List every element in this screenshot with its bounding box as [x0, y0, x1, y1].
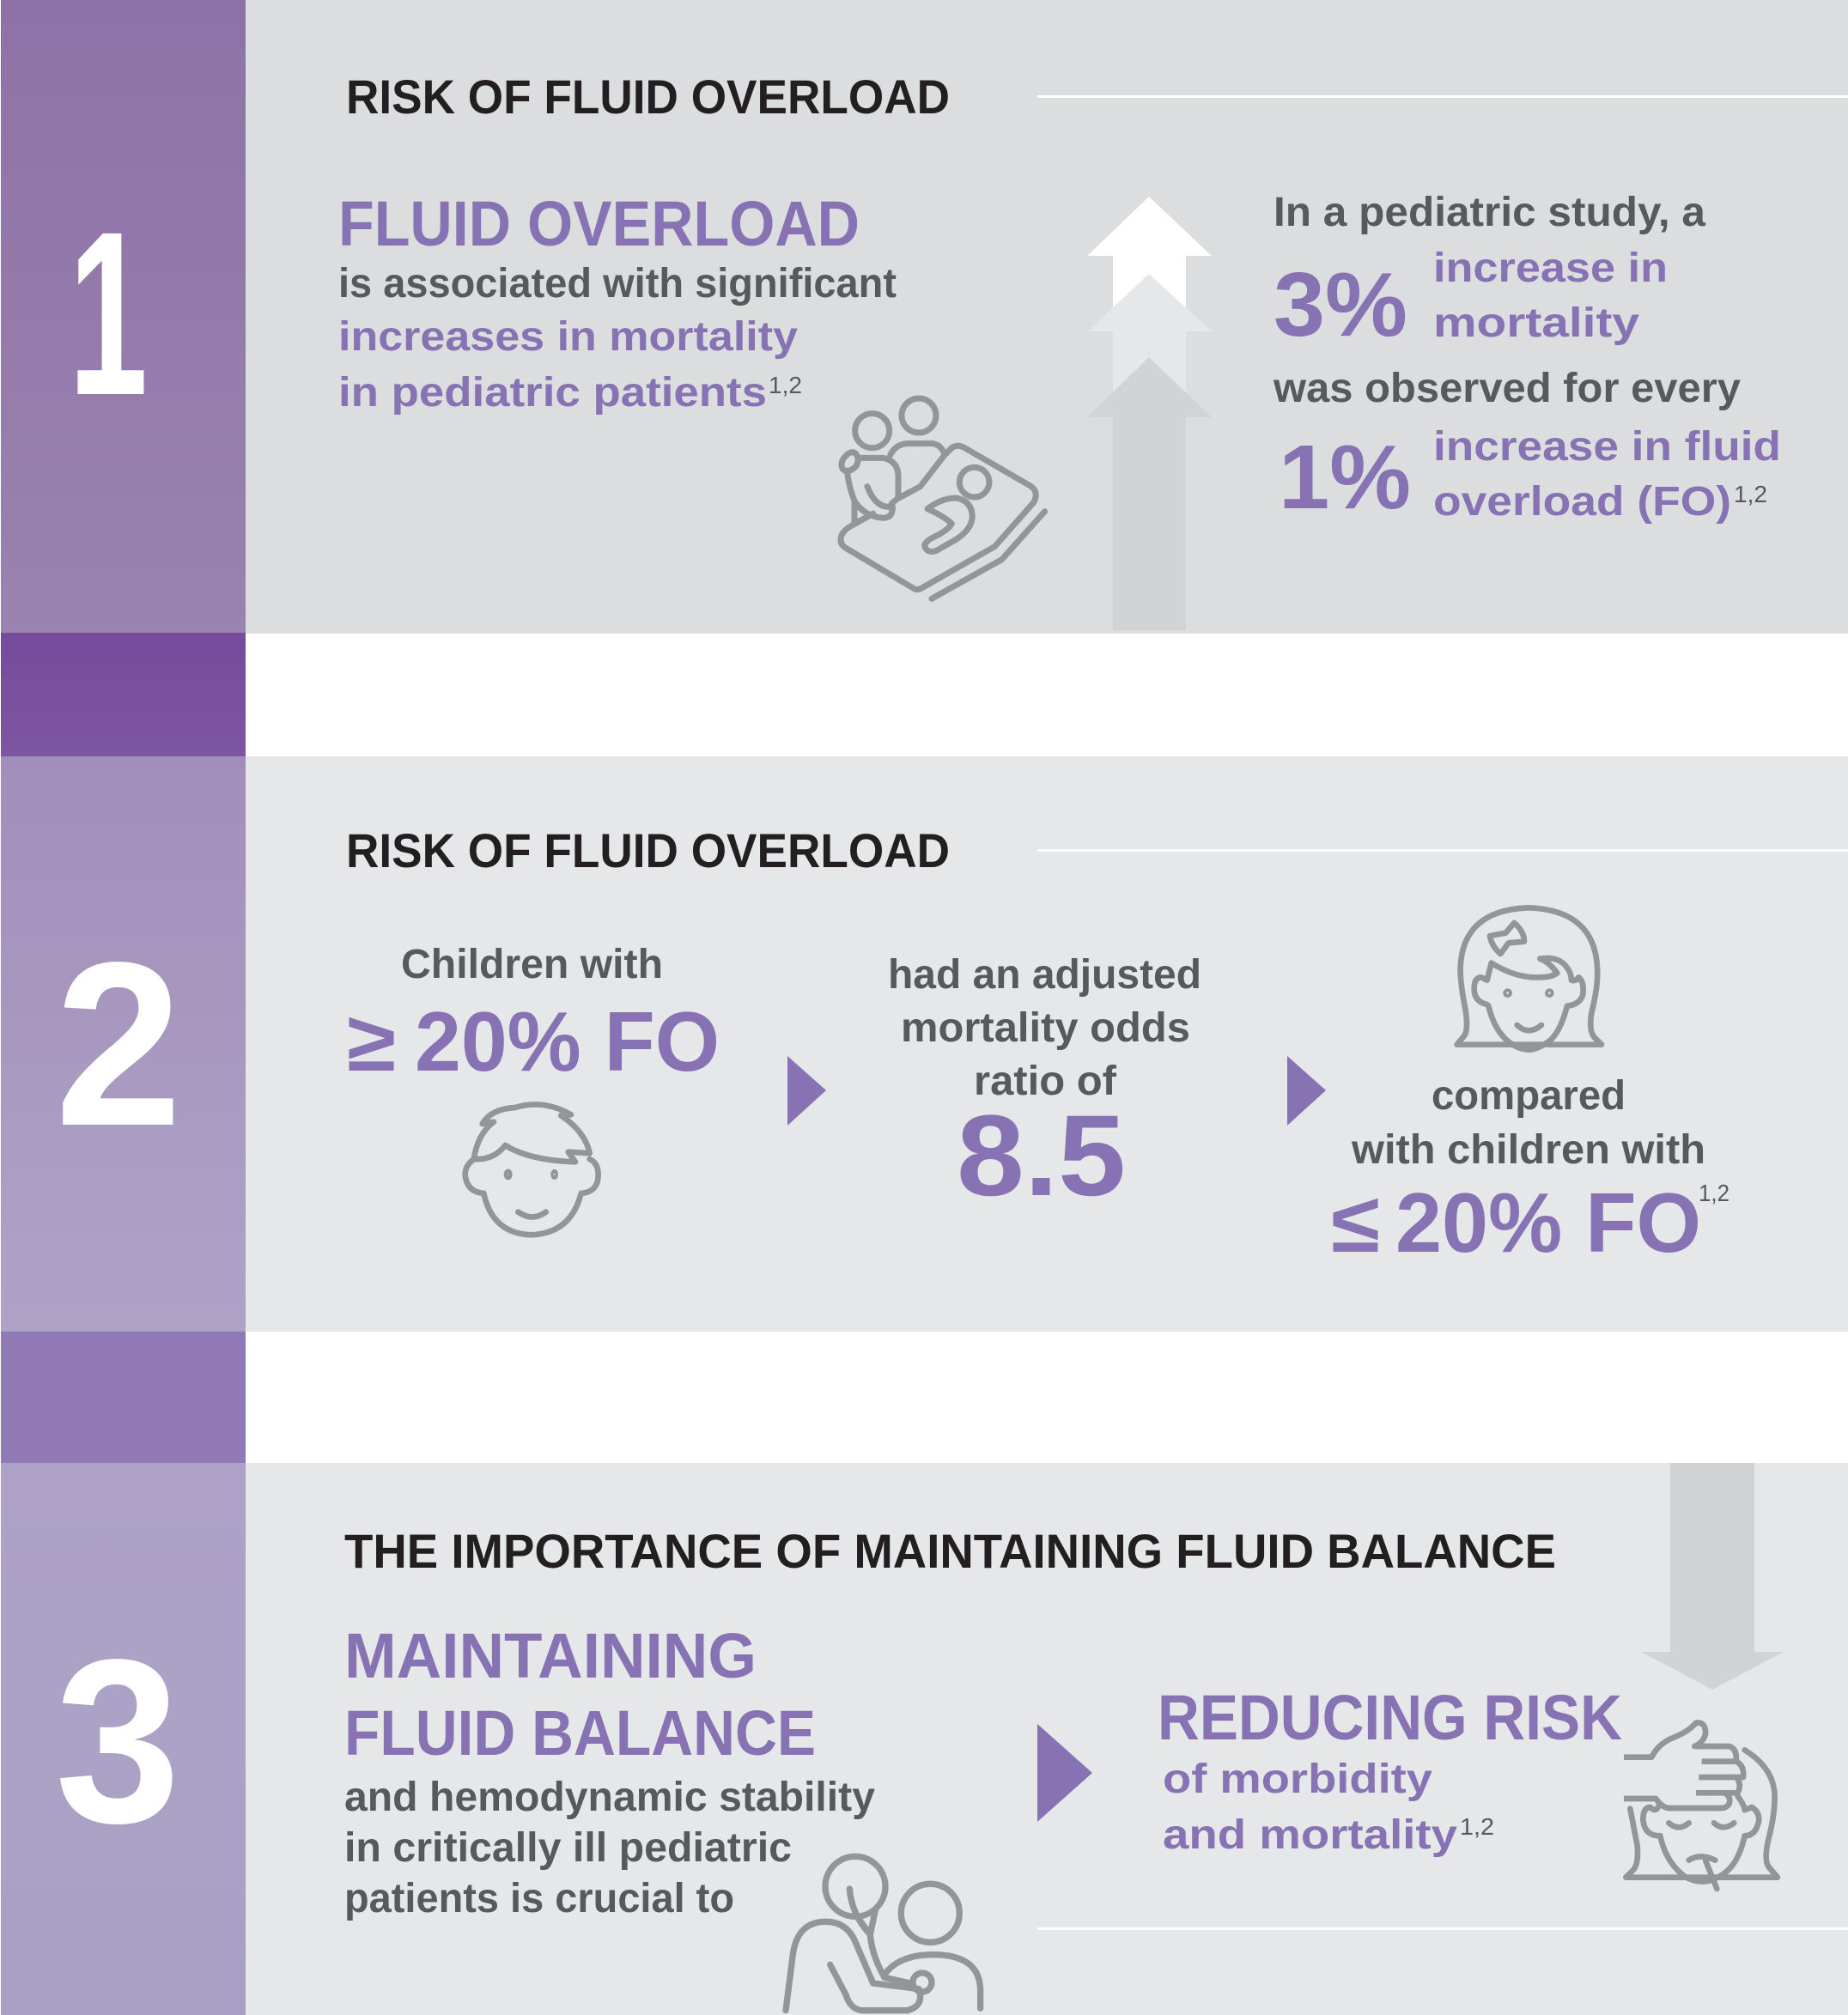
section 3 number block [1, 1463, 246, 2015]
text block: children with at least 20% FO: Children with [401, 942, 663, 987]
panel: section 3 [1, 1463, 1848, 2015]
heading: risk of fluid overload: RISK OF FLUID OVERLOAD [346, 823, 950, 877]
arrow: chevron 3 [1037, 1724, 1092, 1822]
text block: pediatric study statistics [1273, 190, 1781, 528]
text block: children with at least 20% FO [347, 942, 720, 1089]
icon: doctor with stethoscope [786, 1856, 981, 2011]
icon: hand on sick child's forehead [1624, 1722, 1778, 1889]
text block: pediatric study statistics: 3% [1274, 254, 1407, 355]
text block: adjusted mortality odds ratio: mortality odds [901, 1005, 1190, 1051]
text block: pediatric study statistics: 1,2 [1734, 481, 1767, 507]
sidebar connector 2 [1, 1332, 246, 1463]
text block: compared with children: ≤ [1331, 1175, 1380, 1270]
text block: compared with children [1331, 1073, 1729, 1270]
text block: reducing risk: 1,2 [1460, 1813, 1494, 1840]
text block: compared with children: 20% FO [1395, 1175, 1701, 1270]
text block: pediatric study statistics: In a pediatric study, a [1274, 190, 1705, 235]
text block: fluid overload statement: FLUID OVERLOAD [338, 188, 860, 259]
text block: fluid overload statement: increases in mortality [338, 314, 798, 360]
icon: caregiver and child in bed [841, 398, 1045, 598]
text block: maintaining fluid balance: and hemodynamic stability [344, 1775, 875, 1820]
text block: pediatric study statistics: mortality [1433, 300, 1639, 346]
panel: section 2 [1, 756, 1848, 1332]
text block: reducing risk: of morbidity [1163, 1757, 1432, 1802]
icon: girl face [1457, 907, 1602, 1050]
arrows: rising risk [1087, 197, 1212, 630]
arrow: downward risk [1641, 1463, 1784, 1690]
text block: pediatric study statistics: increase in fluid [1433, 424, 1781, 470]
sidebar connector 1 [1, 633, 246, 756]
text block: children with at least 20% FO: 20% FO [415, 994, 720, 1089]
text block: fluid overload statement: in pediatric patients [338, 370, 767, 416]
text block: reducing risk: REDUCING RISK [1158, 1682, 1622, 1753]
text block: pediatric study statistics: 1% [1279, 427, 1411, 528]
text block: reducing risk: and mortality [1163, 1812, 1457, 1858]
text block: adjusted mortality odds ratio: had an adjusted [888, 952, 1201, 998]
text block: maintaining fluid balance: in critically ill pediatric [344, 1825, 792, 1871]
text block: reducing risk [1158, 1682, 1622, 1858]
text block: adjusted mortality odds ratio: 8.5 [957, 1092, 1126, 1220]
arrow: chevron 2 [1287, 1056, 1326, 1126]
arrow: chevron 1 [787, 1056, 826, 1126]
panel: section 1 [1, 0, 1848, 634]
text block: pediatric study statistics: overload (FO) [1433, 479, 1731, 525]
icon: boy face [465, 1104, 599, 1235]
section 1 number block [1, 0, 246, 633]
text block: maintaining fluid balance: patients is crucial to [344, 1876, 734, 1921]
text block: maintaining fluid balance [344, 1620, 875, 1921]
text block: compared with children: 1,2 [1699, 1180, 1729, 1206]
text block: compared with children: compared [1432, 1073, 1626, 1119]
text block: adjusted mortality odds ratio: ratio of [974, 1059, 1117, 1104]
text block: maintaining fluid balance: FLUID BALANCE [344, 1697, 816, 1769]
heading: risk of fluid overload: RISK OF FLUID OVERLOAD [346, 70, 950, 124]
section 3 number block: 3 [55, 1611, 180, 1872]
text block: fluid overload statement: is associated with significant [338, 261, 897, 306]
section 2 number block [1, 756, 246, 1332]
section 1 number block: 1 [69, 183, 148, 444]
heading: maintaining fluid balance: THE IMPORTANCE OF MAINTAINING FLUID BALANCE [344, 1524, 1556, 1578]
text block: children with at least 20% FO: ≥ [347, 994, 396, 1089]
text block: compared with children: with children with [1351, 1127, 1705, 1173]
section 2 number block: 2 [55, 913, 182, 1174]
text block: pediatric study statistics: was observed for every [1273, 366, 1741, 411]
text block: fluid overload statement: 1,2 [769, 372, 802, 398]
text block: maintaining fluid balance: MAINTAINING [344, 1620, 757, 1691]
text block: fluid overload statement [338, 188, 897, 416]
text block: adjusted mortality odds ratio [888, 952, 1201, 1220]
text block: pediatric study statistics: increase in [1433, 246, 1668, 291]
